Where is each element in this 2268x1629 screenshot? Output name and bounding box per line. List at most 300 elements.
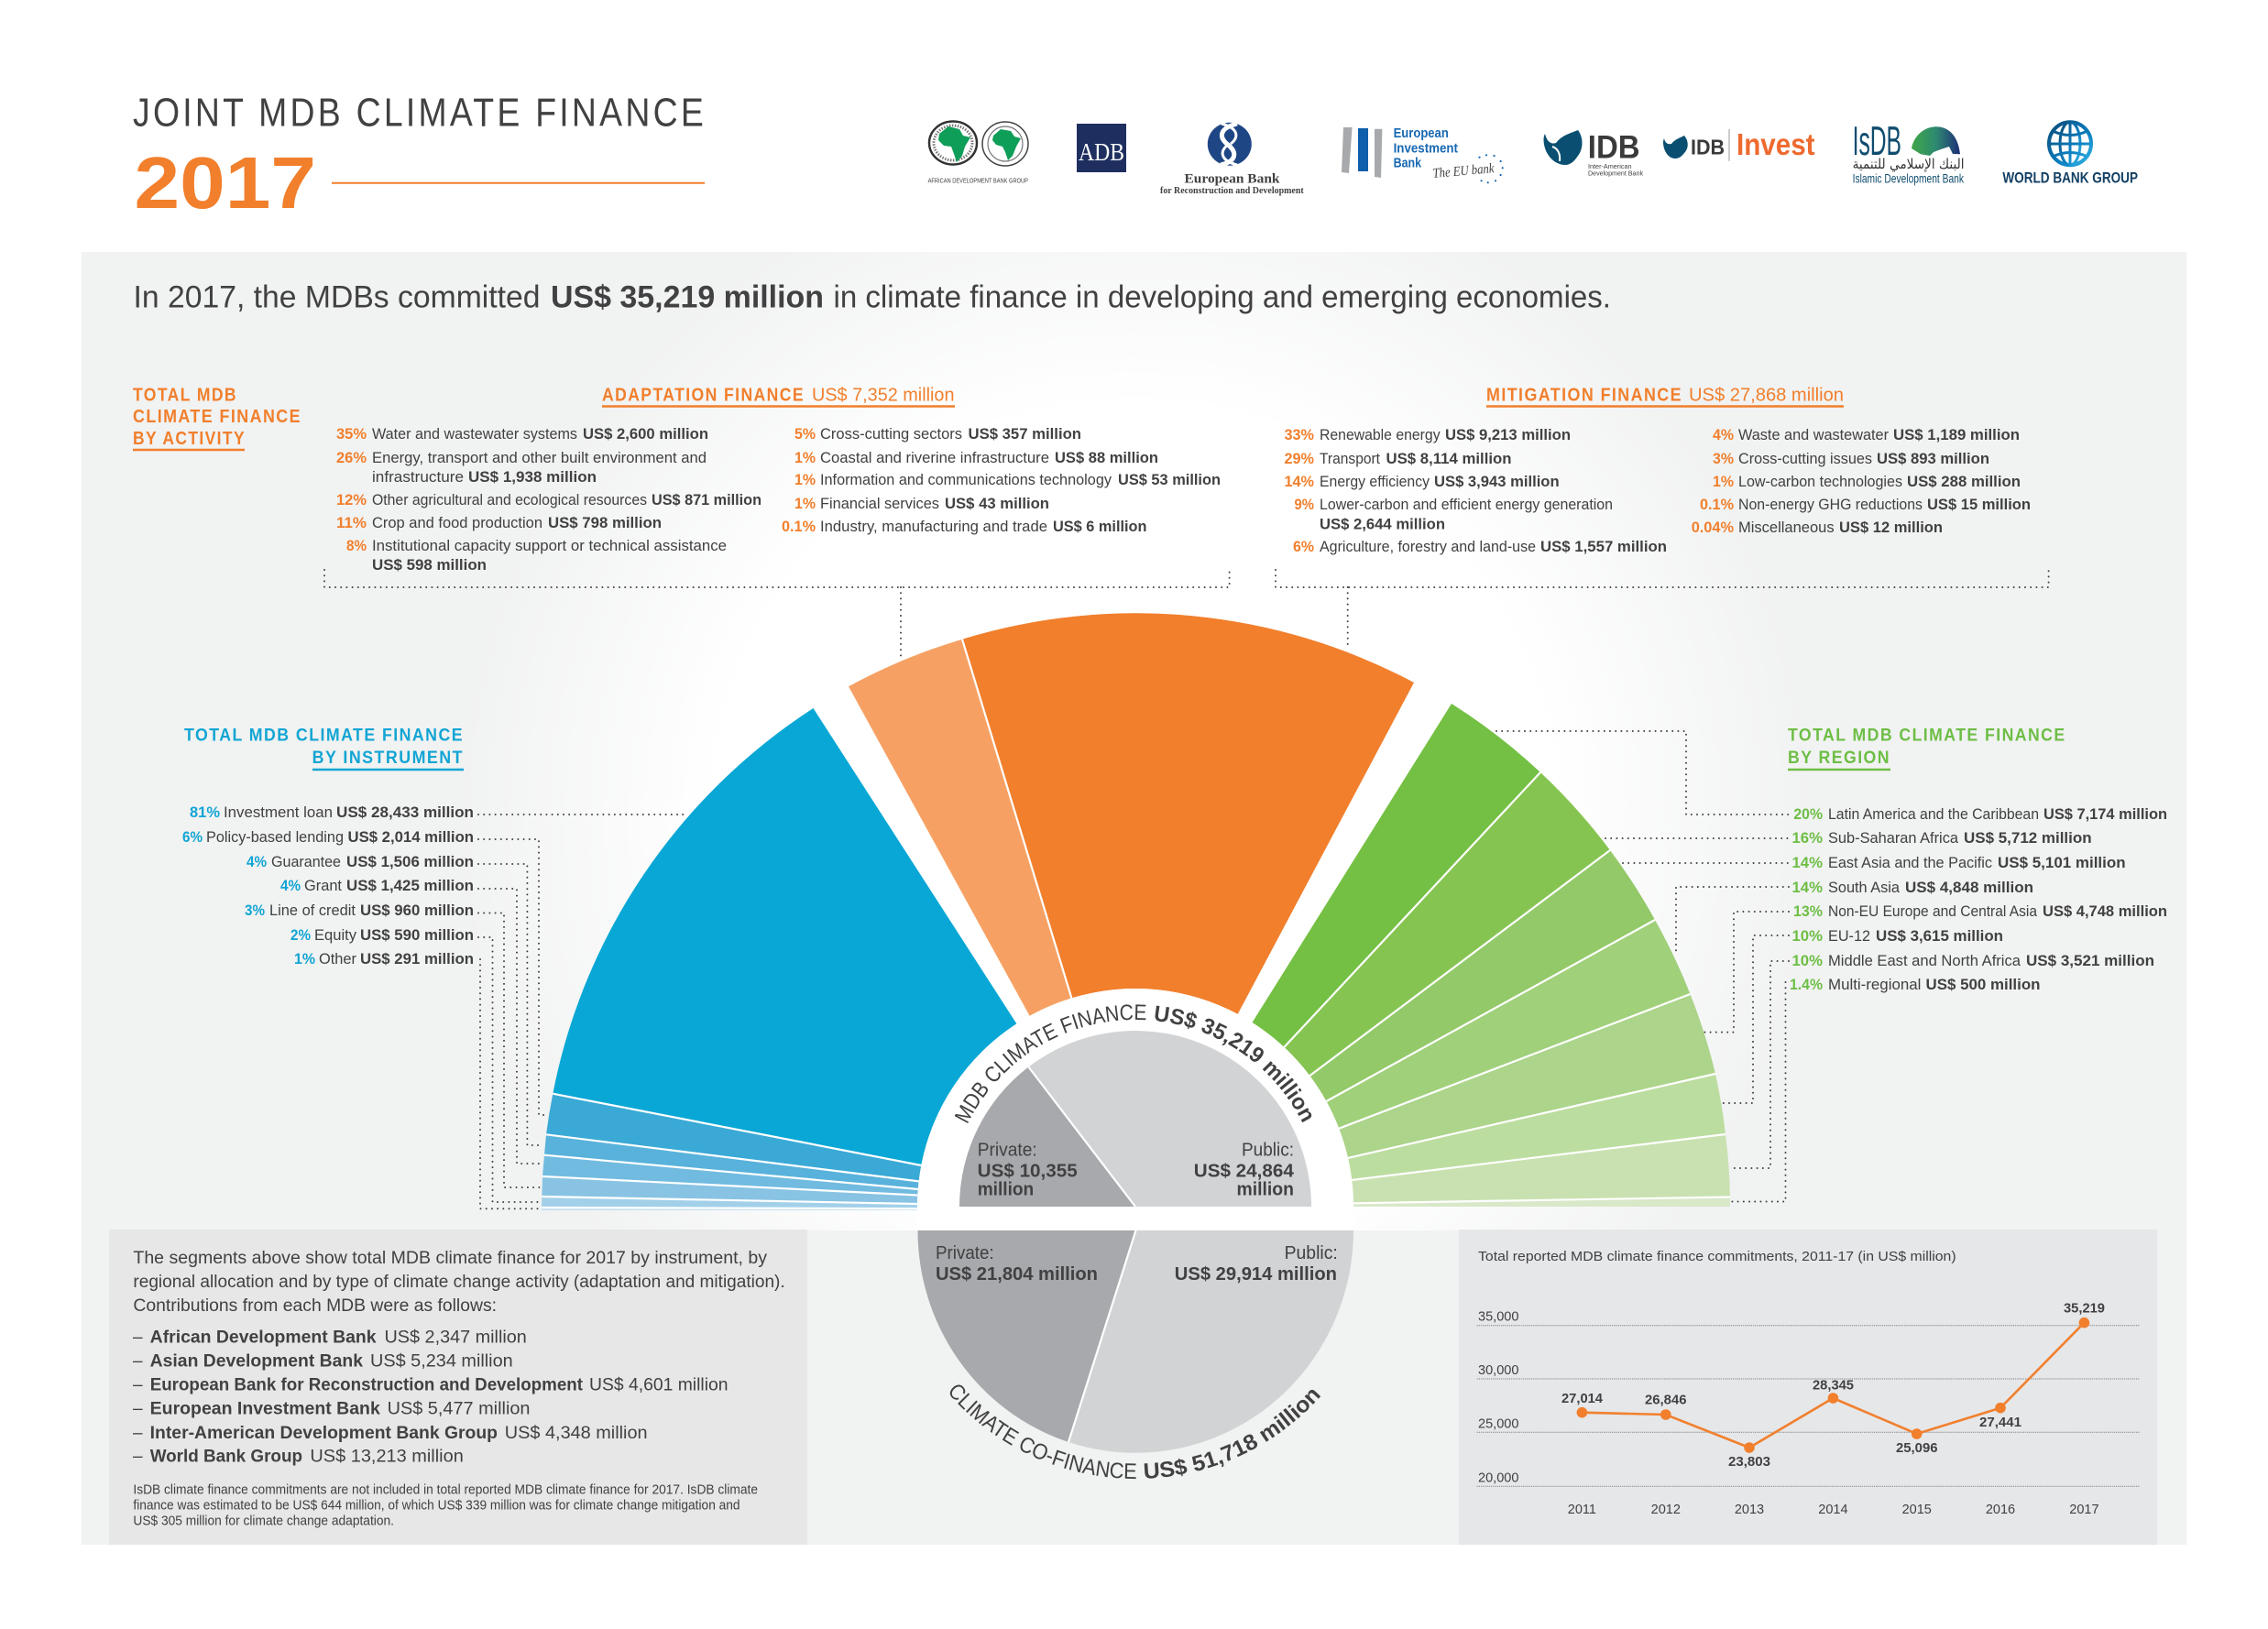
row: non-energy GHG: US$ 15 million — [1927, 497, 2031, 513]
row: cross-cutting sectors: Cross-cutting sectors — [820, 426, 962, 443]
data labels: 23,803 — [1728, 1455, 1770, 1470]
row: energy efficiency: Energy efficiency — [1320, 474, 1430, 490]
row: investment loan: US$ 28,433 million — [336, 804, 474, 821]
text: IsDB footnote: finance was estimated to be US$ 644 million, of which US$ 339 million was for climate change mitigation and — [133, 1499, 740, 1514]
label: public: Public: — [1242, 1141, 1294, 1161]
logo: Islamic Development Bank: Islamic Development Bank — [1853, 170, 1965, 185]
row: ICT: Information and communications technology — [820, 472, 1112, 488]
x axis labels — [1568, 1503, 2099, 1517]
heading: by instrument: TOTAL MDB CLIMATE FINANCE — [184, 726, 464, 746]
row: crop and food: US$ 798 million — [548, 515, 662, 531]
row: line of credit: Line of credit — [269, 902, 356, 919]
row: investment loan — [190, 804, 474, 821]
row: Sub-Saharan Africa: Sub-Saharan Africa — [1828, 830, 1959, 847]
row: agriculture: US$ 1,557 million — [1540, 539, 1667, 555]
bracket: mitigation leader — [1276, 570, 2049, 647]
slice: public — [1028, 1031, 1311, 1207]
region leader lines — [1496, 731, 1789, 1202]
background panel — [82, 252, 2186, 1545]
row: African Development Bank: African Development Bank — [150, 1328, 377, 1348]
row: guarantee: US$ 1,506 million — [346, 854, 474, 870]
row: multi-regional: US$ 500 million — [1926, 977, 2040, 993]
heading: total MDB climate finance by activity — [133, 385, 301, 450]
data labels: 26,846 — [1645, 1394, 1686, 1408]
wedge: adaptation — [849, 640, 1071, 1016]
row: Middle East — [1792, 953, 2154, 969]
row: line of credit — [245, 902, 474, 919]
row: low-carbon technologies: 1% — [1713, 474, 1734, 490]
row: cross-cutting sectors: 5% — [794, 426, 816, 443]
row: Latin America: US$ 7,174 million — [2043, 806, 2167, 823]
heading: by instrument — [184, 726, 464, 770]
EU stars — [1478, 154, 1504, 183]
list: MDB contributions — [133, 1328, 728, 1467]
row: crop and food: Crop and food production — [372, 515, 542, 531]
row: line of credit: US$ 960 million — [360, 902, 474, 919]
title — [133, 92, 707, 224]
instrument list — [182, 804, 474, 968]
row: IDB: – — [133, 1424, 143, 1443]
data labels: 35,219 — [2064, 1302, 2105, 1317]
row: South Asia: US$ 4,848 million — [1905, 880, 2033, 896]
label: public: US$ 29,914 million — [1175, 1264, 1337, 1285]
wedge: South Asia — [1326, 920, 1690, 1129]
segment chart: activity wedges — [849, 613, 1414, 1016]
row: investment loan: Investment loan — [224, 804, 333, 821]
logo: World Bank Group: WORLD BANK GROUP — [2002, 169, 2138, 186]
row: energy efficiency — [1285, 474, 1560, 490]
row: East Asia: US$ 5,101 million — [1998, 855, 2126, 871]
logo: World Bank Group — [2002, 122, 2138, 186]
logo: European Investment Bank — [1342, 126, 1504, 183]
logo: European Bank for Reconstruction and Development: for Reconstruction and Development — [1160, 186, 1304, 196]
row: Asian Development Bank — [133, 1352, 513, 1372]
row: cross-cutting issues: 3% — [1713, 451, 1734, 467]
bracket: adaptation leader — [324, 570, 1230, 656]
wedge: Latin America — [1252, 704, 1540, 1047]
curved label: MDB climate finance: US$ 35,219 million — [1155, 1006, 1312, 1123]
data labels: 25,096 — [1896, 1441, 1937, 1456]
row: guarantee — [247, 854, 474, 870]
panel: notes and MDB contributions — [109, 1230, 807, 1545]
row: ICT — [794, 472, 1221, 488]
x axis labels: 2011 — [1568, 1503, 1596, 1517]
row: Middle East: US$ 3,521 million — [2026, 953, 2154, 969]
row: EBRD: US$ 4,601 million — [589, 1376, 728, 1395]
row: energy, transport: 26% — [336, 450, 367, 466]
row: renewable energy: Renewable energy — [1320, 427, 1441, 443]
row: South Asia — [1792, 880, 2033, 896]
row: multi-regional: Multi-regional — [1828, 977, 1921, 993]
row: miscellaneous — [1692, 519, 1943, 536]
heading: by region — [1788, 726, 2066, 770]
x axis labels: 2016 — [1986, 1503, 2015, 1517]
logo: European Investment Bank: The EU bank — [1432, 161, 1495, 181]
row: IDB: Inter-American Development Bank Group — [150, 1424, 498, 1443]
label: public: US$ 24,864 — [1194, 1162, 1295, 1182]
row: EIB: European Investment Bank — [150, 1400, 380, 1419]
row: Latin America — [1793, 806, 2167, 823]
y axis grid and labels: 25,000 — [1478, 1417, 1519, 1432]
row: institutional capacity — [346, 538, 727, 574]
row: East Asia: 14% — [1792, 855, 1823, 871]
row: multi-regional: 1.4% — [1790, 977, 1823, 993]
row: line of credit: 3% — [245, 902, 265, 919]
text: intro paragraph: regional allocation and by type of climate change activity (adaptation and mitigation). — [133, 1273, 785, 1292]
intro statement: US$ 35,219 million — [551, 280, 824, 315]
row: grant: Grant — [304, 878, 342, 894]
text: IsDB footnote: US$ 305 million for climate change adaptation. — [133, 1514, 394, 1529]
row: Non-EU Europe: Non-EU Europe and Central Asia — [1828, 903, 2038, 920]
x axis labels: 2013 — [1735, 1503, 1764, 1517]
row: equity: Equity — [314, 927, 357, 944]
slice: public — [1068, 1230, 1353, 1453]
text: EBRD name: European Bank — [1184, 171, 1280, 186]
row: energy, transport — [336, 450, 707, 486]
row: Non-EU Europe — [1793, 903, 2167, 920]
text: intro paragraph: The segments above show total MDB climate finance for 2017 by instrument, by — [133, 1249, 768, 1268]
text: EIB name — [1394, 126, 1458, 171]
heading: adaptation finance: ADAPTATION FINANCE — [602, 385, 805, 405]
row: EIB: – — [133, 1400, 143, 1419]
row: lower-carbon: Lower-carbon and efficient energy generation — [1320, 497, 1613, 513]
row: grant — [280, 878, 474, 894]
logo: African Development Bank — [928, 121, 1028, 184]
row: grant: 4% — [280, 878, 301, 894]
row: Asian Development Bank: Asian Development Bank — [150, 1352, 363, 1372]
central white glow — [367, 252, 1906, 1230]
x axis labels: 2012 — [1651, 1503, 1681, 1517]
y axis grid and labels: 30,000 — [1478, 1363, 1519, 1378]
heading: mitigation finance: US$ 27,868 million — [1689, 385, 1844, 405]
row: other: US$ 291 million — [360, 951, 474, 968]
row: South Asia: 14% — [1792, 880, 1823, 896]
label: private: US$ 21,804 million — [936, 1264, 1098, 1285]
row: cross-cutting issues — [1713, 451, 1989, 467]
wedge: equity — [542, 1197, 917, 1208]
row: coastal: US$ 88 million — [1055, 450, 1158, 466]
row: investment loan: 81% — [190, 804, 220, 821]
row: other: 1% — [294, 951, 315, 968]
row: Non-EU Europe: US$ 4,748 million — [2043, 903, 2167, 920]
row: grant: US$ 1,425 million — [346, 878, 474, 894]
chart title: Total reported MDB climate finance commitments, 2011-17 (in US$ million) — [1478, 1250, 1956, 1264]
row: energy, transport: Energy, transport and other built environment and — [372, 450, 707, 466]
row: equity — [290, 927, 474, 944]
heading: joint MDB climate finance: JOINT MDB CLIMATE FINANCE — [133, 92, 707, 136]
row: renewable energy: US$ 9,213 million — [1445, 427, 1571, 443]
label: private: Private: — [936, 1243, 994, 1263]
row: other — [294, 951, 474, 968]
text: IsDB footnote — [133, 1483, 758, 1529]
y axis grid and labels — [1477, 1310, 2140, 1486]
row: Middle East: Middle East and North Africa — [1828, 953, 2021, 969]
x axis labels: 2015 — [1902, 1503, 1932, 1517]
label: public: million — [1237, 1180, 1294, 1200]
row: African Development Bank: – — [133, 1328, 143, 1348]
row: South Asia: South Asia — [1828, 880, 1901, 896]
wedge: policy-based lending — [546, 1094, 921, 1181]
curved label: climate co-finance: US$ 51,718 million — [1144, 1389, 1321, 1479]
row: other agricultural: US$ 871 million — [652, 492, 761, 508]
row: institutional capacity: 8% — [346, 538, 367, 554]
row: East Asia: East Asia and the Pacific — [1828, 855, 1992, 871]
row: transport: 29% — [1285, 451, 1314, 467]
row: African Development Bank: US$ 2,347 million — [385, 1328, 527, 1348]
row: EU-12: EU-12 — [1828, 928, 1870, 945]
row: EU-12 — [1792, 928, 2003, 945]
mitigation list, left column — [1285, 427, 1667, 555]
row: agriculture: Agriculture, forestry and land-use — [1320, 539, 1536, 555]
heading: total MDB climate finance by activity: TOTAL MDB — [133, 385, 237, 405]
logo: Islamic Development Bank — [1853, 119, 1965, 185]
curved label: climate co-finance — [949, 1385, 1321, 1479]
row: ICT: 1% — [794, 472, 816, 488]
row: low-carbon technologies — [1713, 474, 2021, 490]
pie: climate co-finance split — [918, 1230, 1353, 1453]
row: transport: US$ 8,114 million — [1386, 451, 1512, 467]
row: IDB: US$ 4,348 million — [505, 1424, 648, 1443]
heading: adaptation finance: US$ 7,352 million — [812, 385, 955, 405]
text: IDB full name: Development Bank — [1588, 169, 1643, 178]
row: financial services — [794, 496, 1049, 512]
row: industry: Industry, manufacturing and trade — [820, 519, 1047, 535]
row: EU-12: 10% — [1792, 928, 1823, 945]
row: lower-carbon: 9% — [1294, 497, 1314, 513]
row: guarantee: 4% — [247, 854, 267, 870]
row: transport: Transport — [1320, 451, 1380, 467]
heading: mitigation finance: MITIGATION FINANCE — [1486, 385, 1682, 405]
slice: private — [918, 1230, 1136, 1442]
data markers — [1577, 1317, 2089, 1453]
row: water — [336, 426, 708, 443]
logo: African Development Bank: AFRICAN DEVELOPMENT BANK GROUP — [928, 178, 1028, 184]
row: Asian Development Bank: – — [133, 1352, 143, 1372]
heading: adaptation finance — [602, 385, 955, 407]
row: Non-EU Europe: 13% — [1793, 903, 1823, 920]
row: policy-based lending: Policy-based lending — [206, 829, 344, 846]
row: IDB — [133, 1424, 648, 1443]
text: intro paragraph: Contributions from each MDB were as follows: — [133, 1296, 497, 1316]
text: EIB name: Investment — [1394, 142, 1458, 157]
row: policy-based lending: 6% — [182, 829, 203, 846]
row: cross-cutting issues: Cross-cutting issues — [1738, 451, 1872, 467]
wedge: other — [542, 1208, 917, 1210]
row: EBRD: European Bank for Reconstruction and Development — [150, 1376, 584, 1395]
label: private: US$ 10,355 — [978, 1162, 1078, 1182]
row: Latin America: Latin America and the Caribbean — [1828, 806, 2039, 823]
logo: IDB Invest: IDB — [1691, 135, 1725, 159]
wedge: line of credit — [542, 1176, 917, 1204]
row: other: Other — [319, 951, 356, 968]
logo: Inter-American Development Bank — [1543, 129, 1643, 178]
row: energy, transport: US$ 1,938 million — [468, 469, 597, 486]
row: water: US$ 2,600 million — [583, 426, 708, 443]
row: multi-regional — [1790, 977, 2040, 993]
row: coastal — [794, 450, 1158, 466]
row: renewable energy — [1285, 427, 1571, 443]
row: equity: 2% — [290, 927, 311, 944]
white centre ring and band — [917, 989, 1353, 1230]
wedge: investment loan — [553, 708, 1016, 1165]
row: World Bank — [133, 1448, 464, 1467]
row: miscellaneous: Miscellaneous — [1738, 519, 1835, 536]
row: waste — [1713, 427, 2020, 443]
curved label: MDB climate finance — [955, 1004, 1312, 1123]
row: Asian Development Bank: US$ 5,234 million — [370, 1352, 513, 1372]
slice: private — [959, 1066, 1135, 1207]
data labels: 28,345 — [1813, 1379, 1854, 1394]
row: waste: Waste and wastewater — [1738, 427, 1889, 443]
wedge: Non-EU Europe — [1339, 994, 1715, 1158]
text: EIB name: European — [1394, 126, 1449, 141]
row: other agricultural: 12% — [336, 492, 367, 508]
row: coastal: Coastal and riverine infrastructure — [820, 450, 1049, 466]
row: EIB: US$ 5,477 million — [388, 1400, 530, 1419]
row: coastal: 1% — [794, 450, 816, 466]
heading: by instrument: BY INSTRUMENT — [312, 748, 464, 768]
row: policy-based lending — [182, 829, 474, 846]
intro statement: in climate finance in developing and emerging economies. — [834, 280, 1611, 315]
mitigation list, right column — [1692, 427, 2031, 536]
label: public — [1175, 1243, 1338, 1285]
row: energy efficiency: 14% — [1285, 474, 1314, 490]
adaptation list, left column — [336, 426, 761, 574]
data labels: 27,441 — [1979, 1416, 2021, 1430]
label: private: million — [978, 1180, 1034, 1200]
wedge: multi-regional — [1353, 1197, 1730, 1207]
data labels — [1561, 1302, 2105, 1470]
row: EBRD: – — [133, 1376, 143, 1395]
row: EIB — [133, 1400, 530, 1419]
wedge: guarantee — [544, 1134, 919, 1189]
pie: MDB climate finance split — [959, 1031, 1311, 1207]
logo: IDB Invest — [1663, 127, 1815, 161]
panel: line chart — [1459, 1230, 2157, 1545]
heading: year: 2017 — [134, 142, 316, 224]
label: public: Public: — [1285, 1243, 1338, 1263]
logo: Islamic Development Bank: IsDB — [1853, 119, 1901, 164]
row: Sub-Saharan Africa: 16% — [1792, 830, 1823, 847]
row: World Bank: World Bank Group — [150, 1448, 302, 1467]
wedge: Sub-Saharan Africa — [1284, 772, 1610, 1076]
row: crop and food — [336, 515, 662, 531]
logo: Asian Development Bank — [1077, 124, 1126, 172]
region list — [1790, 806, 2167, 993]
row: other agricultural — [336, 492, 761, 508]
row: industry — [782, 519, 1147, 535]
row: agriculture: 6% — [1293, 539, 1314, 555]
data line — [1582, 1323, 2084, 1448]
label: private — [936, 1243, 1098, 1285]
row: lower-carbon: US$ 2,644 million — [1320, 517, 1445, 533]
row: low-carbon technologies: Low-carbon technologies — [1738, 474, 1902, 490]
row: energy, transport: infrastructure — [372, 469, 464, 486]
row: equity: US$ 590 million — [360, 927, 474, 944]
heading: by region: TOTAL MDB CLIMATE FINANCE — [1788, 726, 2066, 746]
y axis grid and labels: 20,000 — [1478, 1471, 1519, 1486]
row: Sub-Saharan Africa — [1792, 830, 2092, 847]
logo: IDB Invest: Invest — [1737, 127, 1815, 161]
row: institutional capacity: Institutional capacity support or technical assistance — [372, 538, 727, 554]
row: non-energy GHG — [1700, 497, 2031, 513]
x axis labels: 2014 — [1818, 1503, 1848, 1517]
row: industry: 0.1% — [782, 519, 816, 535]
label: private — [978, 1141, 1078, 1200]
row: energy efficiency: US$ 3,943 million — [1434, 474, 1560, 490]
row: water: Water and wastewater systems — [372, 426, 577, 443]
row: renewable energy: 33% — [1285, 427, 1314, 443]
row: World Bank: US$ 13,213 million — [310, 1448, 464, 1467]
row: non-energy GHG: 0.1% — [1700, 497, 1734, 513]
row: Latin America: 20% — [1793, 806, 1823, 823]
row: guarantee: Guarantee — [271, 854, 341, 870]
text: IDB full name — [1588, 162, 1643, 178]
row: World Bank: – — [133, 1448, 143, 1467]
y axis grid and labels: 35,000 — [1478, 1310, 1519, 1325]
text: intro paragraph — [133, 1249, 785, 1316]
heading: mitigation finance — [1486, 385, 1844, 407]
row: East Asia — [1792, 855, 2126, 871]
adaptation list, right column — [782, 426, 1221, 535]
row: transport — [1285, 451, 1512, 467]
row: miscellaneous: 0.04% — [1692, 519, 1734, 536]
row: Sub-Saharan Africa: US$ 5,712 million — [1964, 830, 2092, 847]
instrument leader lines — [478, 814, 684, 1208]
row: financial services: 1% — [794, 496, 816, 512]
logos row — [928, 119, 2138, 196]
row: Middle East: 10% — [1792, 953, 1823, 969]
row: crop and food: 11% — [336, 515, 367, 531]
row: agriculture — [1293, 539, 1667, 555]
row: water: 35% — [336, 426, 367, 443]
logo: Inter-American Development Bank: IDB — [1588, 129, 1640, 165]
row: lower-carbon — [1294, 497, 1613, 533]
row: financial services: Financial services — [820, 496, 939, 512]
row: non-energy GHG: Non-energy GHG reductions — [1738, 497, 1923, 513]
heading: total MDB climate finance by activity: BY ACTIVITY — [133, 429, 246, 449]
segment chart: instrument wedges — [542, 708, 1016, 1210]
text: IDB full name: Inter-American — [1588, 162, 1631, 170]
row: ICT: US$ 53 million — [1118, 472, 1221, 488]
row: financial services: US$ 43 million — [945, 496, 1049, 512]
row: miscellaneous: US$ 12 million — [1839, 519, 1943, 536]
label: public — [1194, 1141, 1295, 1200]
wedge: East Asia — [1309, 850, 1655, 1101]
row: EU-12: US$ 3,615 million — [1876, 928, 2003, 945]
intro statement: In 2017, the MDBs committed — [134, 280, 541, 315]
row: waste: 4% — [1713, 427, 1734, 443]
row: industry: US$ 6 million — [1053, 519, 1147, 535]
logo: Asian Development Bank: ADB — [1079, 137, 1124, 166]
row: cross-cutting sectors: US$ 357 million — [968, 426, 1081, 443]
heading: by region: BY REGION — [1788, 748, 1890, 768]
wedge: EU-12 — [1348, 1074, 1726, 1180]
row: waste: US$ 1,189 million — [1893, 427, 2020, 443]
logo: European Bank for Reconstruction and Development — [1160, 123, 1304, 196]
row: cross-cutting issues: US$ 893 million — [1877, 451, 1989, 467]
row: institutional capacity: US$ 598 million — [372, 557, 487, 574]
wedge: grant — [542, 1155, 918, 1195]
wedge: Middle East — [1352, 1134, 1730, 1203]
label: private: Private: — [978, 1141, 1037, 1161]
x axis labels: 2017 — [2069, 1503, 2099, 1517]
row: policy-based lending: US$ 2,014 million — [348, 829, 474, 846]
heading: total MDB climate finance by activity: CLIMATE FINANCE — [133, 407, 301, 427]
text: EIB name: Bank — [1394, 157, 1422, 171]
text: Arabic name: البنك الإسلامي للتنمية — [1853, 156, 1965, 173]
segment chart: region wedges — [1252, 704, 1730, 1207]
